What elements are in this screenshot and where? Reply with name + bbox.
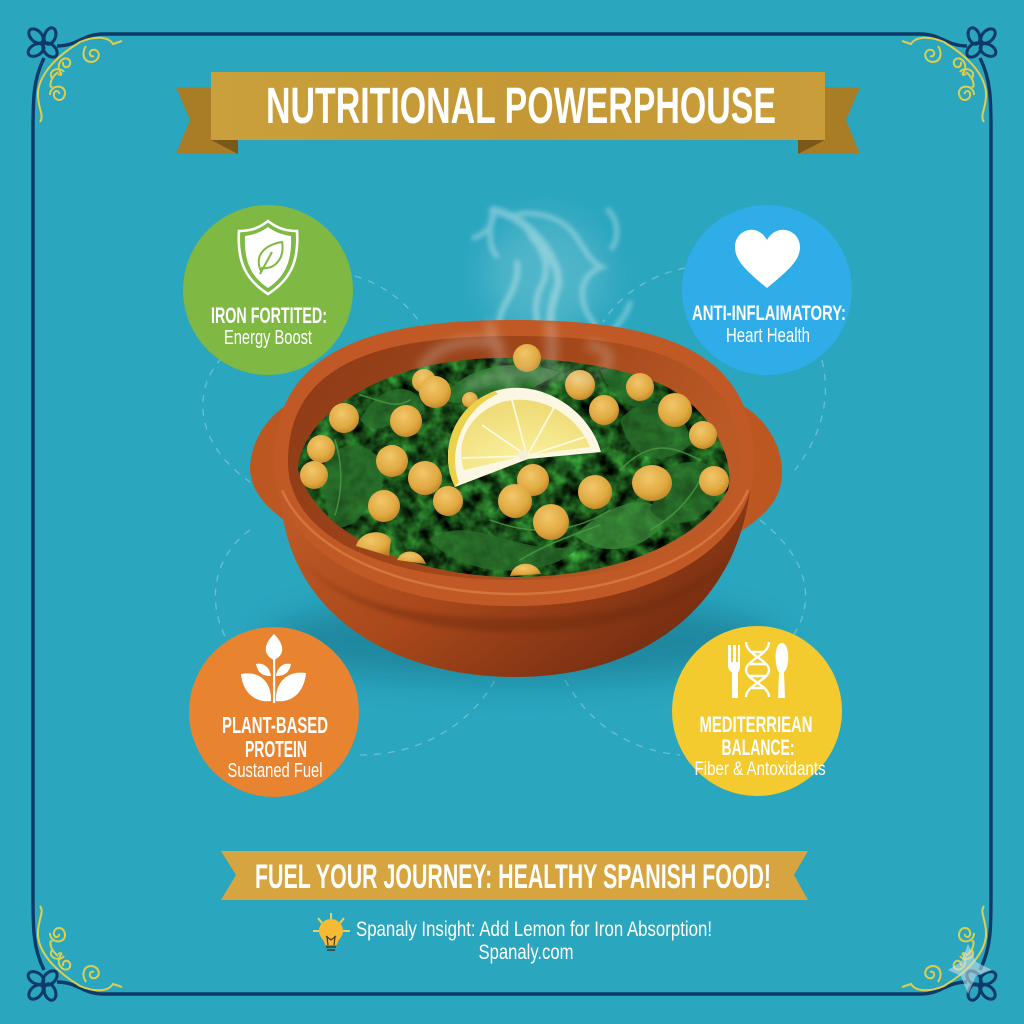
badge: plant-based protein	[189, 627, 359, 797]
bowl interior	[288, 336, 740, 580]
label: ANTI-INFLAIMATORY:	[692, 302, 846, 325]
title ribbon	[176, 72, 860, 154]
rim highlight	[282, 490, 748, 594]
insight text: Spanaly Insight: Add Lemon for Iron Absorption!	[356, 918, 712, 941]
icon: plant sprig	[241, 634, 306, 703]
title: NUTRITIONAL POWERPHOUSE	[266, 77, 776, 134]
icon: shield with leaf	[239, 221, 297, 294]
badge: mediterranean balance	[672, 626, 842, 796]
dashed connector arcs	[203, 268, 825, 755]
sparkle star	[948, 944, 992, 994]
icon: fork, DNA, spoon	[728, 642, 788, 698]
label: MEDITERRIEAN	[700, 712, 812, 737]
website: Spanaly.com	[478, 941, 574, 964]
terracotta bowl	[250, 320, 782, 677]
sublabel: Sustaned Fuel	[228, 760, 322, 782]
label second line: BALANCE:	[722, 735, 794, 760]
bowl rim	[274, 320, 754, 606]
sublabel: Energy Boost	[224, 327, 312, 349]
bowl handles	[250, 398, 782, 532]
bowl body	[280, 490, 750, 677]
bowl shadow	[265, 598, 775, 682]
icon: light bulb	[313, 913, 350, 950]
label: IRON FORTITED:	[211, 303, 327, 328]
sublabel: Fiber & Antoxidants	[694, 759, 826, 780]
spinach	[298, 358, 730, 577]
lemon wedge	[448, 388, 601, 487]
bowl rim shadow	[300, 550, 735, 632]
steam over bowl	[422, 325, 609, 385]
bottom ribbon	[221, 851, 808, 900]
icon: heart	[735, 230, 800, 288]
steam haze above bowl	[485, 220, 605, 330]
badge: anti-inflammatory	[682, 205, 852, 375]
label: PLANT-BASED	[222, 712, 328, 738]
sublabel: Heart Health	[726, 325, 810, 347]
steam above bowl	[474, 210, 630, 360]
label second line: PROTEIN	[245, 736, 307, 762]
badge: iron fortified	[183, 205, 353, 375]
chickpeas	[300, 344, 729, 576]
